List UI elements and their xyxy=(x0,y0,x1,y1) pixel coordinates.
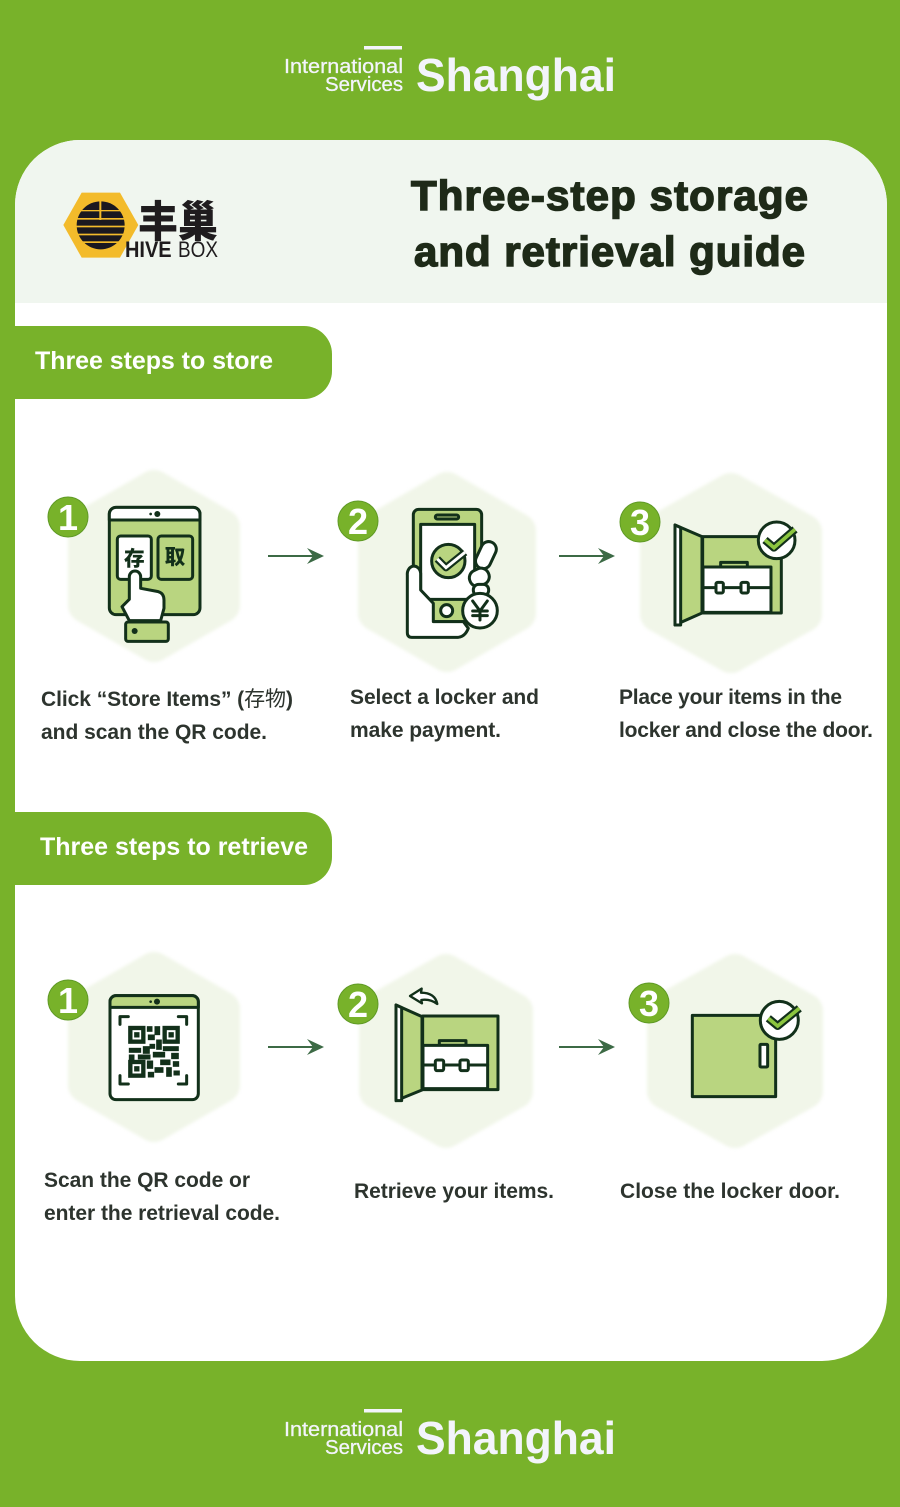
main white panel xyxy=(15,140,887,1361)
caption: retrieve step 3: Close the locker door. xyxy=(620,1180,840,1203)
section heading: store xyxy=(15,326,332,399)
caption: store step 3: Place your items in the xyxy=(619,686,842,709)
badge: store step 2: 2 xyxy=(348,501,368,542)
hexagon: store step 1 xyxy=(86,488,222,644)
badge: retrieve step 3 xyxy=(629,983,669,1024)
hexagon: retrieve step 2 xyxy=(377,972,515,1130)
caption: retrieve step 1: enter the retrieval code. xyxy=(44,1202,280,1225)
caption: store step 2: Select a locker and xyxy=(350,686,539,709)
caption: retrieve step 1 xyxy=(44,1169,280,1225)
hexagon: store step 3 xyxy=(658,491,804,655)
icon: store step 1 touch screen: 存 xyxy=(124,541,145,571)
logo: International Services Shanghai (top): Shanghai xyxy=(416,49,616,101)
badge: store step 3 xyxy=(620,502,660,543)
logo: International Services Shanghai (top) xyxy=(284,46,616,101)
logo: International Services Shanghai (bottom): Shanghai xyxy=(416,1412,616,1464)
badge: retrieve step 2: 2 xyxy=(348,984,368,1025)
arrow xyxy=(268,1039,324,1055)
caption: retrieve step 2: Retrieve your items. xyxy=(354,1180,554,1203)
section heading: retrieve: Three steps to retrieve xyxy=(40,833,308,861)
badge: retrieve step 1 xyxy=(48,980,88,1021)
header band xyxy=(15,140,887,303)
caption: store step 2 xyxy=(350,686,539,742)
badge: store step 1: 1 xyxy=(58,497,78,538)
title: Three-step storage xyxy=(411,172,808,219)
logo: Hive Box xyxy=(63,188,218,262)
badge: retrieve step 2 xyxy=(338,984,378,1025)
section heading: retrieve xyxy=(15,812,332,885)
icon: store step 1 touch screen: 取 xyxy=(165,540,186,570)
hexagon: retrieve step 3 xyxy=(665,972,805,1130)
caption: store step 1: Click “Store Items” (存物) xyxy=(41,688,293,711)
badge: store step 2 xyxy=(338,501,378,542)
icon: retrieve step 3 closed locker xyxy=(692,1001,799,1097)
logo: International Services Shanghai (bottom): Services xyxy=(325,1437,403,1459)
arrow xyxy=(559,1039,615,1055)
icon: retrieve step 2 open locker xyxy=(396,989,498,1101)
logo: International Services Shanghai (top): Services xyxy=(325,74,403,96)
logo: Hive Box: HIVE xyxy=(125,237,172,262)
arrow xyxy=(559,548,615,564)
badge: retrieve step 3: 3 xyxy=(639,983,659,1024)
icon: store step 2 phone payment xyxy=(407,509,499,637)
caption: store step 2: make payment. xyxy=(350,719,501,742)
hexagon: retrieve step 1 xyxy=(86,970,222,1124)
logo: International Services Shanghai (top): International xyxy=(284,56,403,78)
logo: International Services Shanghai (bottom) xyxy=(284,1409,616,1464)
hexagon: store step 2 xyxy=(376,490,518,654)
arrow xyxy=(268,548,324,564)
icon: retrieve step 1 QR code xyxy=(110,996,198,1100)
caption: retrieve step 1: Scan the QR code or xyxy=(44,1169,250,1192)
badge: retrieve step 1: 1 xyxy=(58,980,78,1021)
badge: store step 1 xyxy=(48,497,88,538)
logo: International Services Shanghai (bottom): International xyxy=(284,1419,403,1441)
badge: store step 3: 3 xyxy=(630,502,650,543)
icon: store step 3 locker with case xyxy=(675,522,795,625)
logo: Hive Box: 丰巢 xyxy=(138,188,218,250)
icon: store step 1 touch screen xyxy=(109,507,200,641)
section heading: store: Three steps to store xyxy=(35,347,273,375)
title xyxy=(411,172,808,275)
logo: Hive Box: BOX xyxy=(178,237,218,262)
caption: store step 1 xyxy=(41,688,293,744)
title: and retrieval guide xyxy=(414,228,805,275)
caption: store step 1: and scan the QR code. xyxy=(41,721,267,744)
caption: store step 3 xyxy=(619,686,873,742)
caption: store step 3: locker and close the door. xyxy=(619,719,873,742)
